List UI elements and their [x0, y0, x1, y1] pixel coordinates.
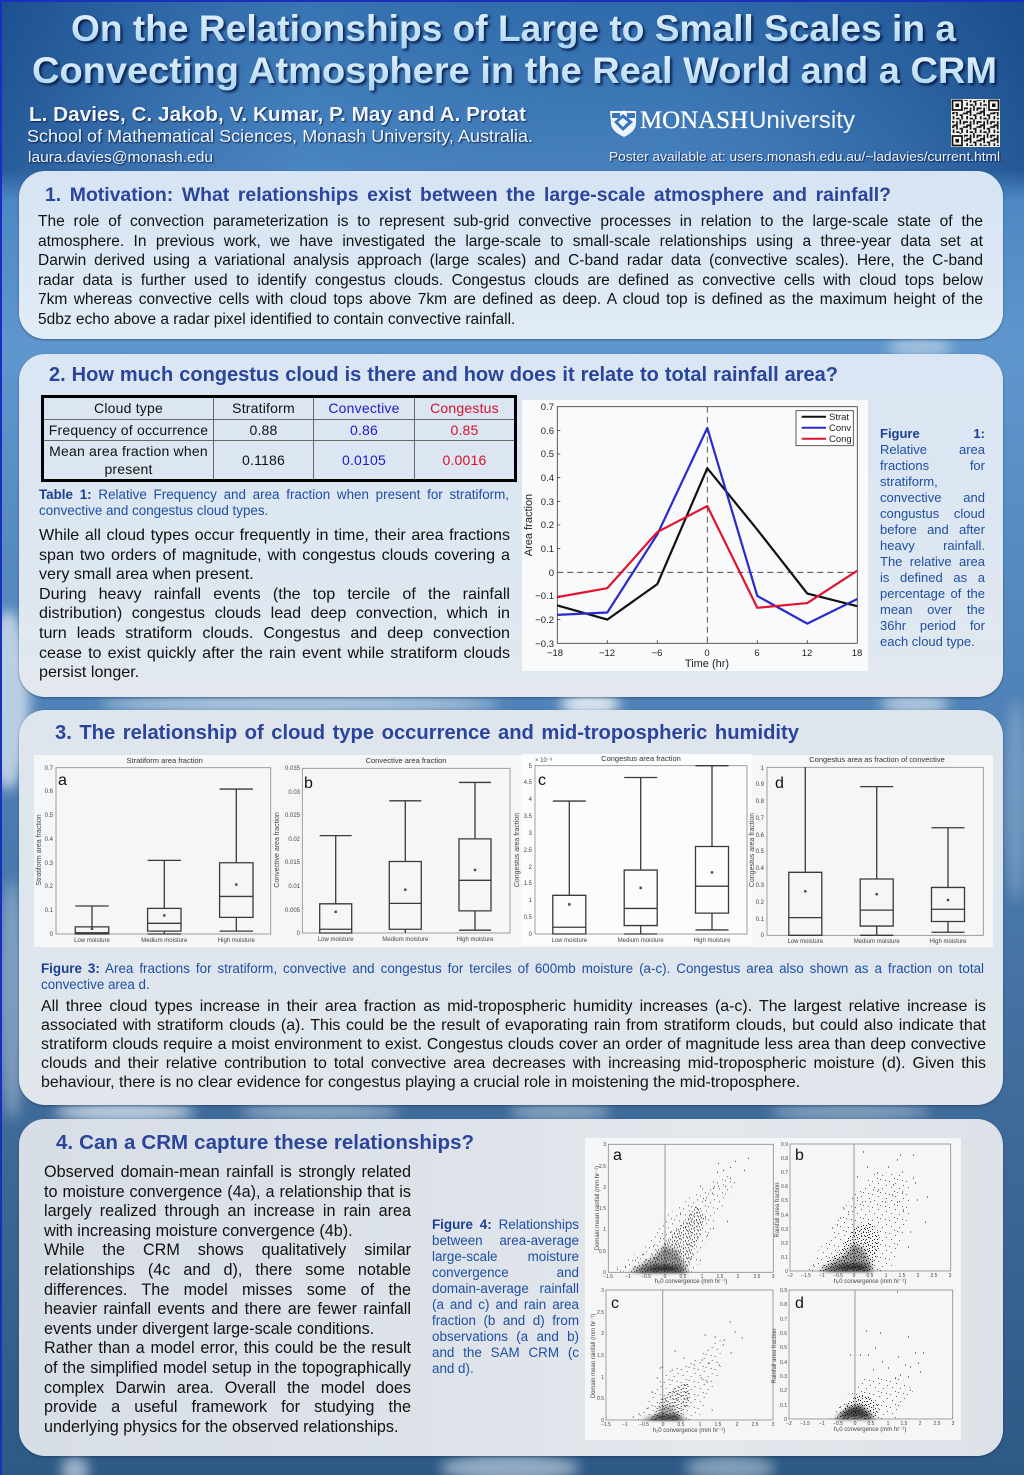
x axis labels: 6: [754, 648, 760, 659]
title: Convecting Atmosphere in the Real World and a CRM: [32, 50, 997, 91]
caption: table 1: [39, 487, 509, 518]
y axis labels: [535, 402, 554, 650]
heading: section 1: 1. Motivation: What relationships exist between the large-scale atmosphere and rainfall?: [45, 184, 891, 206]
scatter a: domain mean rainfall, observations: 1: [603, 1227, 606, 1233]
scatter d: rain area fraction, model: 1: [887, 1421, 890, 1427]
scatter d: rain area fraction, model: 0.1: [780, 1403, 787, 1409]
text block: humidity body: behaviour, there is no clear evidence for congestus playing a crucial role in moistening the mid-troposphere.: [41, 1074, 800, 1091]
boxplot b: convective: Medium moisture: [382, 937, 429, 943]
scatter d: rain area fraction, model: 0.6: [780, 1331, 787, 1337]
caption: figure 4: [432, 1217, 579, 1376]
caption: figure 1: 36hr period for: [880, 618, 985, 633]
panel: 1. motivation: [19, 171, 1003, 339]
scatter d: rain area fraction, model: −1.5: [800, 1421, 810, 1427]
text block: CRM body: of the simplified model setup in the topographically: [44, 1359, 411, 1377]
scatter b: rain area fraction, observations: 0.5: [781, 1198, 788, 1204]
scatter b: rain area fraction, observations: 2: [917, 1273, 920, 1279]
scatter b: rain area fraction, observations: −2: [787, 1273, 793, 1279]
scatter d: rain area fraction, model: 0.9: [780, 1288, 787, 1294]
authors and affiliation: laura.davies@monash.edu: [28, 150, 213, 166]
scatter d: rain area fraction, model: Rainfall area fraction: [772, 1328, 778, 1384]
caption: figure 1: heavy rainfall.: [880, 538, 985, 553]
y axis labels: 0.7: [541, 402, 554, 413]
scatter b: rain area fraction, observations: 0.3: [781, 1227, 788, 1233]
boxplot b: convective: [274, 756, 510, 943]
caption: figure 1: percentage of the: [880, 586, 985, 601]
boxplot a: stratiform: 0.2: [45, 884, 54, 890]
text block: CRM body: relationships (4c and d), there some notable: [44, 1261, 411, 1279]
scatter b: rain area fraction, observations: 0.6: [781, 1184, 788, 1190]
caption: table 1: Table 1: Relative Frequency and area fraction when present for stratiform,: [39, 487, 509, 502]
text block: congestus body: turn leads stratiform clouds. Congestus and deep convection: [39, 624, 510, 642]
boxplot d: congestus over convective: 0.8: [756, 799, 765, 805]
x axis labels: 12: [802, 648, 812, 659]
legend: Strat: [829, 412, 849, 423]
scatter c: domain mean rainfall, model: 1: [601, 1375, 604, 1381]
boxplot d: congestus over convective: 1: [761, 766, 765, 772]
text block: congestus body: distribution) congestus clouds lead deep convection, which in: [39, 604, 510, 622]
text block: CRM body: differences. The model misses some of the: [44, 1281, 411, 1299]
y axis labels: 0.5: [541, 449, 554, 460]
scatter d: rain area fraction, model: 0.5: [868, 1421, 875, 1427]
text block: humidity body: associated with stratiform clouds (a). This could be the result of evaporating rain from stratiform clouds, but could also indicate that: [41, 1017, 986, 1034]
boxplot c: congestus: 3.5: [524, 814, 533, 820]
title: [32, 8, 998, 94]
boxplot b: convective: 0.005: [285, 908, 301, 914]
text block: CRM body: [44, 1163, 411, 1436]
scatter c: domain mean rainfall, model: 2.5: [597, 1310, 604, 1316]
boxplot d: congestus over convective: 0.6: [756, 833, 765, 839]
x axis labels: 0: [704, 648, 710, 659]
scatter a: domain mean rainfall, observations: Domain mean rainfall (mm hr⁻¹): [595, 1166, 601, 1250]
boxplot d: congestus over convective: 0.1: [756, 917, 765, 923]
table: cloud type statistics: [41, 395, 517, 482]
icon: Monash shield: [610, 110, 636, 137]
text block: CRM body: to moisture convergence (4a), a relationship that is: [44, 1183, 411, 1201]
poster link: Poster available at: users.monash.edu.au/~ladavies/current.html: [609, 149, 1000, 164]
boxplot a: stratiform: Low moisture: [74, 938, 110, 944]
boxplot c: congestus: 4.5: [524, 780, 533, 786]
scatter a: domain mean rainfall, observations: 0: [664, 1274, 667, 1280]
scatter b: rain area fraction, observations: [775, 1142, 952, 1285]
table: cloud type statistics: Mean area fraction when: [49, 442, 208, 458]
table: cloud type statistics: 0.86: [350, 422, 378, 438]
boxplot b: convective: 0.025: [285, 813, 301, 819]
scatter b: rain area fraction, observations: h₂0 convergence (mm hr⁻¹): [834, 1279, 906, 1285]
boxplot c: congestus: High moisture: [693, 938, 731, 944]
scatter d: rain area fraction, model: 0.5: [780, 1345, 787, 1351]
caption: figure 4: observations (a and b): [432, 1329, 579, 1344]
text block: motivation body: [38, 213, 983, 328]
scatter d: rain area fraction, model: −0.5: [833, 1421, 843, 1427]
table: cloud type statistics: 0.88: [249, 422, 278, 438]
boxplot b: convective: 0: [297, 931, 301, 937]
x axis labels: −6: [652, 648, 662, 659]
scatter a: domain mean rainfall, observations: 0: [603, 1270, 606, 1276]
table: cloud type statistics: 0.85: [450, 422, 479, 438]
boxplot c: congestus: c: [538, 772, 546, 789]
y axis labels: −0.1: [535, 591, 554, 602]
boxplot b: convective: Convective area fraction: [366, 756, 446, 765]
scatter d: rain area fraction, model: d: [795, 1295, 804, 1312]
scatter c: domain mean rainfall, model: 0: [601, 1418, 604, 1424]
panel: 4. CRM: [19, 1119, 1003, 1456]
scatter d: rain area fraction, model: 0: [854, 1421, 857, 1427]
text block: motivation body: 5dbz echo above a radar pixel identified to contain convective rainfall.: [38, 310, 515, 328]
scatter b: rain area fraction, observations: −1.5: [801, 1273, 811, 1279]
boxplot d: congestus over convective: Congestus area fraction: [749, 813, 756, 887]
scatter b: rain area fraction, observations: 0.2: [781, 1241, 788, 1247]
text block: congestus body: During heavy rainfall events (the top tercile of the rainfall: [39, 585, 510, 603]
scatter a: domain mean rainfall, observations: 3: [603, 1142, 606, 1148]
heading: section 4: 4. Can a CRM capture these relationships?: [56, 1131, 474, 1154]
boxplot c: congestus: 0.5: [524, 915, 533, 921]
scatter a: domain mean rainfall, observations: 2.5: [599, 1164, 606, 1170]
scatter a: domain mean rainfall, observations: 2.5: [754, 1274, 761, 1280]
text block: CRM body: provide a useful framework for studying the: [44, 1398, 411, 1416]
caption: figure 1: before and after: [880, 522, 985, 537]
scatter b: rain area fraction, observations: 0.5: [867, 1273, 874, 1279]
title: On the Relationships of Large to Small Scales in a: [71, 8, 956, 49]
boxplot a: stratiform: 0.1: [45, 908, 54, 914]
scatter b: rain area fraction, observations: 2.5: [931, 1273, 938, 1279]
axis titles: Area fraction: [523, 494, 535, 556]
scatter d: rain area fraction, model: 2: [919, 1421, 922, 1427]
boxplot d: congestus over convective: High moisture: [929, 939, 967, 945]
scatter b: rain area fraction, observations: 0.4: [781, 1213, 788, 1219]
scatter b: rain area fraction, observations: 0.1: [781, 1255, 788, 1261]
scatter a: domain mean rainfall, observations: 0.5: [680, 1274, 687, 1280]
caption: figure 1: mean over the: [880, 602, 985, 617]
y axis labels: 0.4: [541, 473, 554, 484]
table: cloud type statistics: Congestus: [430, 400, 499, 416]
y axis labels: 0.3: [541, 497, 554, 508]
boxplot a: stratiform: [36, 756, 271, 944]
axis titles: [523, 494, 729, 670]
scatter c: domain mean rainfall, model: 1.5: [715, 1422, 722, 1428]
scatter a: domain mean rainfall, observations: −0.5: [641, 1274, 651, 1280]
scatter b: rain area fraction, observations: 0.9: [781, 1142, 788, 1148]
text block: motivation body: atmosphere. In previous work, we have investigated the large-scale to small-scale relationships using a three-year data set at: [38, 232, 983, 250]
boxplot c: congestus: 2.5: [524, 848, 533, 854]
text block: congestus body: persist longer.: [39, 663, 139, 681]
table: cloud type statistics: 0.0105: [342, 452, 386, 468]
text block: congestus body: While all cloud types occur frequently in time, their area fractions: [39, 526, 510, 544]
boxplot c: congestus: 3: [529, 831, 533, 837]
y axis labels: −0.2: [535, 615, 554, 626]
scatter c: domain mean rainfall, model: Domain mean rainfall (mm hr⁻¹): [591, 1314, 597, 1398]
table: cloud type statistics: 0.0016: [442, 452, 487, 468]
caption: figure 3: convective area d.: [41, 977, 150, 992]
boxplot d: congestus over convective: Medium moisture: [854, 939, 900, 945]
scatter d: rain area fraction, model: 0.7: [780, 1317, 787, 1323]
caption: figure 4: domain-average rainfall: [432, 1281, 579, 1296]
scatter a: domain mean rainfall, observations: h₂0 convergence (mm hr⁻¹): [655, 1279, 727, 1285]
boxplot b: convective: Convective area fraction: [274, 812, 281, 888]
boxplot d: congestus over convective: 0.7: [756, 816, 765, 822]
line: Conv: [557, 428, 857, 624]
boxplot c: congestus: Medium moisture: [618, 938, 664, 944]
table: cloud type statistics: present: [104, 461, 153, 477]
y axis labels: 0.2: [541, 520, 554, 531]
scatter d: rain area fraction, model: 0.8: [780, 1302, 787, 1308]
text block: CRM body: While the CRM shows qualitatively similar: [44, 1241, 411, 1259]
caption: figure 1: [880, 426, 985, 649]
scatter b: rain area fraction, observations: Rainfall area fraction: [775, 1182, 781, 1238]
scatter b: rain area fraction, observations: −0.5: [833, 1273, 843, 1279]
text block: congestus body: very small area when present.: [39, 565, 254, 583]
scatter c: domain mean rainfall, model: 0.5: [597, 1396, 604, 1402]
scatter d: rain area fraction, model: −1: [819, 1421, 825, 1427]
text block: motivation body: Darwin derived using a variational analysis approach (large scales) and C-band radar data (convective scales). Here, the C-band: [38, 252, 983, 269]
y axis labels: −0.3: [535, 639, 554, 650]
text block: motivation body: 7km whereas convective cells with cloud tops above 7km are defined as deep. A cloud top is defined as the maximum height of the: [38, 291, 983, 308]
boxplot a: stratiform: 0.6: [45, 789, 54, 795]
scatter a: domain mean rainfall, observations: 3: [772, 1274, 775, 1280]
scatter b: rain area fraction, observations: 3: [949, 1273, 952, 1279]
text block: humidity body: stratiform clouds require a moist environment to exist. Congestus clouds cover an order of magnitude less area than deep convective: [41, 1036, 986, 1053]
caption: figure 1: stratiform,: [880, 474, 938, 489]
scatter b: rain area fraction, observations: 0.7: [781, 1170, 788, 1176]
line: Cong: [557, 506, 857, 608]
text block: motivation body: radar data is further used to identify congestus clouds. Congestus clouds are defined as convective cells with cloud tops below: [38, 272, 983, 288]
boxplot d: congestus over convective: Congestus area as fraction of convective: [809, 755, 945, 764]
scatter a: domain mean rainfall, observations: −1.5: [603, 1274, 613, 1280]
boxplot a: stratiform: a: [58, 772, 67, 789]
boxplot d: congestus over convective: 0: [761, 933, 765, 939]
scatter c: domain mean rainfall, model: 2: [736, 1422, 739, 1428]
table: cloud type statistics: Frequency of occurrence: [49, 422, 208, 438]
scatter c: domain mean rainfall, model: 1: [699, 1422, 702, 1428]
scatter a: domain mean rainfall, observations: a: [613, 1147, 622, 1164]
boxplot a: stratiform: 0.3: [45, 861, 54, 867]
y axis labels: 0.6: [541, 426, 554, 437]
text block: CRM body: underlying physics for the observed relationships.: [44, 1418, 399, 1436]
boxplot a: stratiform: Stratiform area fraction: [127, 756, 203, 765]
boxplot d: congestus over convective: 0.5: [756, 849, 765, 855]
boxplot d: congestus over convective: 0.9: [756, 782, 765, 788]
scatter c: domain mean rainfall, model: 0: [662, 1422, 665, 1428]
text block: CRM body: largely realized through an increase in rain area: [44, 1202, 411, 1220]
text block: CRM body: with increasing moisture convergence (4b).: [44, 1222, 353, 1240]
scatter d: rain area fraction, model: −2: [786, 1421, 792, 1427]
caption: figure 1: is defined as a: [880, 570, 985, 585]
text block: CRM body: Observed domain-mean rainfall is strongly related: [44, 1163, 411, 1181]
scatter d: rain area fraction, model: [772, 1288, 955, 1433]
boxplot c: congestus: 4: [529, 797, 533, 803]
scatter a: domain mean rainfall, observations: 1.5: [599, 1206, 606, 1212]
scatter a: domain mean rainfall, observations: 1.5: [717, 1274, 724, 1280]
boxplot d: congestus over convective: Low moisture: [787, 939, 824, 945]
boxplot d: congestus over convective: 0.2: [756, 900, 765, 906]
boxplot a: stratiform: 0: [50, 932, 54, 938]
scatter d: rain area fraction, model: 0: [784, 1417, 787, 1423]
table: cloud type statistics: 0.1186: [242, 452, 285, 468]
scatter d: rain area fraction, model: 0.2: [780, 1388, 787, 1394]
caption: figure 4: fraction (b and d) from: [432, 1313, 579, 1328]
boxplot b: convective: 0.01: [288, 884, 301, 890]
line: Strat: [557, 468, 857, 620]
scatter c: domain mean rainfall, model: 3: [772, 1422, 775, 1428]
text block: CRM body: Rather than a model error, this could be the result: [44, 1339, 411, 1357]
scatter d: rain area fraction, model: h₂0 convergence (mm hr⁻¹): [834, 1427, 906, 1433]
boxplot c: congestus: [514, 754, 747, 944]
boxplot c: congestus: Congestus area fraction: [601, 754, 681, 763]
scatter a: domain mean rainfall, observations: [595, 1142, 775, 1285]
boxplot a: stratiform: 0.5: [45, 813, 54, 819]
text block: CRM body: events under divergent large-scale conditions.: [44, 1320, 374, 1338]
QR code: [951, 99, 1000, 147]
legend: [796, 411, 853, 446]
caption: figure 4: large-scale moisture: [432, 1249, 579, 1264]
scatter b: rain area fraction, observations: 0: [853, 1273, 856, 1279]
boxplot a: stratiform: High moisture: [218, 938, 255, 944]
authors and affiliation: School of Mathematical Sciences, Monash University, Australia.: [27, 126, 533, 146]
scatter b: rain area fraction, observations: 0: [785, 1269, 788, 1275]
text block: humidity body: All three cloud types increase in their area fraction as mid-tropospheric humidity increases (a-c). The largest relative increase is: [41, 998, 986, 1015]
caption: figure 3: Figure 3: Area fractions for stratiform, convective and congestus for terciles of 600mb moisture (a-c). Congestus area also shown as a fraction on total: [41, 961, 984, 976]
caption: figure 1: convective and: [880, 490, 985, 505]
boxplot a: stratiform: 0.4: [45, 837, 54, 843]
scatter a: domain mean rainfall, observations: 0.5: [599, 1249, 606, 1255]
caption: figure 1: Relative area: [880, 442, 985, 457]
boxplot d: congestus over convective: d: [775, 775, 784, 792]
scatter c: domain mean rainfall, model: 2: [601, 1331, 604, 1337]
scatter d: rain area fraction, model: 1.5: [901, 1421, 908, 1427]
text block: congestus body: span two orders of magnitude, with congestus clouds covering a: [39, 546, 510, 564]
scatter d: rain area fraction, model: 2.5: [934, 1421, 941, 1427]
legend: Conv: [829, 423, 851, 434]
scatter d: rain area fraction, model: 3: [952, 1421, 955, 1427]
boxplot b: convective: 0.02: [288, 837, 301, 843]
caption: table 1: convective and congestus cloud types.: [39, 503, 268, 518]
scatter c: domain mean rainfall, model: h₂0 convergence (mm hr⁻¹): [653, 1428, 725, 1434]
caption: figure 1: The relative area: [880, 554, 985, 569]
boxplot b: convective: Low moisture: [318, 937, 354, 943]
boxplot d: congestus over convective: [749, 755, 983, 945]
heading: section 2: 2. How much congestus cloud is there and how does it relate to total rainfall area?: [49, 364, 838, 386]
boxplot c: congestus: 2: [529, 865, 533, 871]
boxplot c: congestus: Congestus area fraction: [514, 813, 521, 887]
boxplot b: convective: b: [304, 775, 313, 792]
y axis labels: 0: [549, 568, 554, 579]
scatter c: domain mean rainfall, model: [591, 1288, 775, 1434]
scatter b: rain area fraction, observations: 1: [885, 1273, 888, 1279]
scatter a: domain mean rainfall, observations: −1: [625, 1274, 631, 1280]
boxplot d: congestus over convective: 0.4: [756, 866, 765, 872]
caption: figure 1: Figure 1:: [880, 426, 985, 441]
scatter a: domain mean rainfall, observations: 2: [737, 1274, 740, 1280]
x axis labels: 18: [852, 648, 862, 659]
scatter b: rain area fraction, observations: b: [795, 1147, 804, 1164]
chart: boxplots a to d: [34, 754, 993, 947]
table: cloud type statistics: Stratiform: [232, 400, 295, 416]
boxplot a: stratiform: 0.7: [45, 766, 54, 772]
authors and affiliation: L. Davies, C. Jakob, V. Kumar, P. May and A. Protat: [29, 104, 526, 126]
text block: CRM body: heavier rainfall events and there are fewer rainfall: [44, 1300, 411, 1318]
boxplot b: convective: High moisture: [456, 937, 494, 943]
logo: Monash University: MONASH: [640, 107, 748, 134]
scatter c: domain mean rainfall, model: −1: [622, 1422, 628, 1428]
caption: figure 3: [41, 961, 984, 992]
scatter c: domain mean rainfall, model: c: [611, 1295, 619, 1312]
caption: figure 1: fractions for: [880, 458, 985, 473]
scatter c: domain mean rainfall, model: −0.5: [639, 1422, 649, 1428]
scatter d: rain area fraction, model: 0.4: [780, 1360, 787, 1366]
y axis labels: 0.1: [541, 544, 554, 555]
scatter c: domain mean rainfall, model: 1.5: [597, 1353, 604, 1359]
authors and affiliation: [27, 104, 534, 166]
scatter c: domain mean rainfall, model: 2.5: [752, 1422, 759, 1428]
boxplot c: congestus: Low moisture: [551, 938, 588, 944]
scatter b: rain area fraction, observations: 0.8: [781, 1156, 788, 1162]
table: cloud type statistics: Cloud type: [94, 400, 163, 416]
boxplot c: congestus: 1: [529, 898, 533, 904]
caption: figure 4: Figure 4: Relationships: [432, 1217, 579, 1232]
text block: congestus body: [39, 526, 510, 681]
caption: figure 4: and the SAM CRM (c: [432, 1345, 579, 1360]
caption: figure 1: each cloud type.: [880, 634, 975, 649]
heading: section 3: 3. The relationship of cloud type occurrence and mid-tropospheric humidity: [55, 722, 799, 744]
scatter b: rain area fraction, observations: 1.5: [899, 1273, 906, 1279]
boxplot b: convective: 0.03: [288, 790, 301, 796]
boxplot c: congestus: × 10⁻³: [535, 758, 552, 764]
caption: figure 4: and d).: [432, 1361, 474, 1376]
boxplot c: congestus: 5: [529, 764, 533, 770]
scatter c: domain mean rainfall, model: −1.5: [601, 1422, 611, 1428]
boxplot c: congestus: 0: [529, 932, 533, 938]
scatter c: domain mean rainfall, model: 0.5: [678, 1422, 685, 1428]
text block: congestus body: cease to exist quickly after the rain event while stratiform clouds: [39, 644, 510, 662]
x axis labels: [547, 648, 862, 659]
caption: figure 4: convergence and: [432, 1265, 579, 1280]
logo: Monash University: University: [749, 107, 855, 134]
panel: 2. congestus amount: [19, 354, 1003, 697]
legend: Cong: [829, 434, 852, 445]
table: cloud type statistics: Convective: [328, 400, 400, 416]
boxplot a: stratiform: Medium moisture: [141, 938, 188, 944]
scatter b: rain area fraction, observations: −1: [819, 1273, 825, 1279]
boxplot b: convective: 0.015: [285, 860, 301, 866]
boxplot d: congestus over convective: 0.3: [756, 883, 765, 889]
axis titles: Time (hr): [685, 658, 729, 670]
boxplot a: stratiform: Stratiform area fraction: [36, 814, 43, 886]
scatter a: domain mean rainfall, observations: 1: [701, 1274, 704, 1280]
caption: figure 4: between area-average: [432, 1233, 579, 1248]
chart: scatter plots a to d: [585, 1138, 961, 1440]
chart: area fraction line chart: [522, 400, 868, 671]
x axis labels: −12: [599, 648, 615, 659]
scatter a: domain mean rainfall, observations: 2: [603, 1185, 606, 1191]
text block: motivation body: The role of convection parameterization is to represent sub-grid convective processes in relation to the large-scale state of the: [38, 213, 983, 230]
scatter c: domain mean rainfall, model: 3: [601, 1288, 604, 1294]
scatter d: rain area fraction, model: 0.3: [780, 1374, 787, 1380]
text block: humidity body: [41, 998, 986, 1091]
caption: figure 4: (a and c) and rain area: [432, 1297, 579, 1312]
text block: humidity body: clouds and their relative contribution to total convective area decreases with increasing mid-tropospheric moisture (d). Given this: [41, 1055, 986, 1072]
text block: CRM body: complex Darwin area. Overall the model does: [44, 1379, 411, 1397]
boxplot c: congestus: 1.5: [524, 881, 533, 887]
logo: Monash University: [610, 107, 855, 137]
caption: figure 1: congustus cloud: [880, 506, 985, 521]
x axis labels: −18: [547, 648, 563, 659]
panel: 3. humidity: [19, 710, 1003, 1105]
boxplot b: convective: 0.035: [285, 766, 301, 772]
